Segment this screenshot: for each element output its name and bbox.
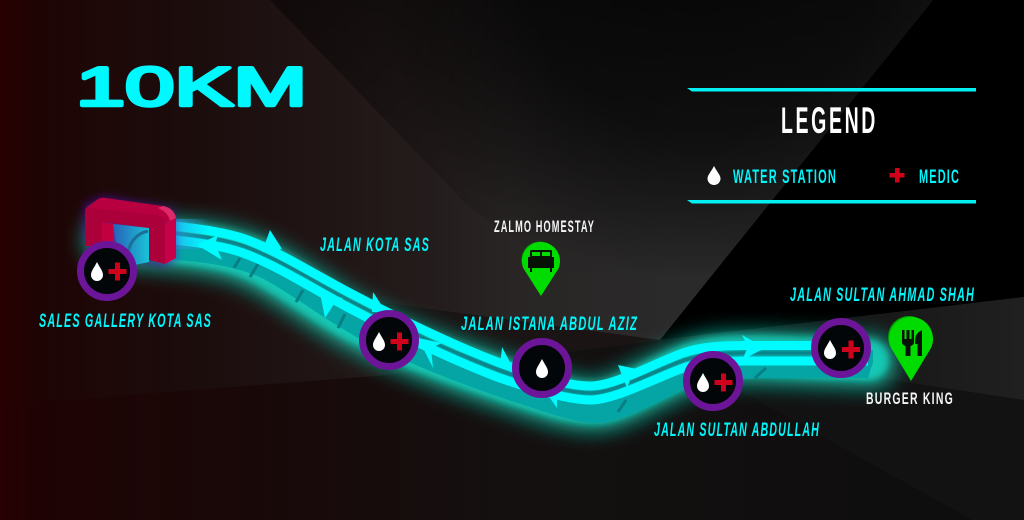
station: sales gallery	[80, 244, 134, 298]
blue fade near gate	[172, 219, 210, 249]
icon: water drop	[373, 332, 385, 351]
icon: medic cross	[842, 340, 860, 358]
medic label: MEDIC	[919, 167, 960, 188]
station: jalan kota sas	[362, 314, 416, 366]
road lower lane	[175, 240, 868, 400]
road lane divider	[175, 233, 830, 393]
gate front face	[85, 208, 165, 264]
road upper lane	[175, 226, 830, 386]
label: jalan sultan abdullah: JALAN SULTAN ABDULLAH	[654, 420, 820, 441]
legend top rule	[687, 88, 976, 92]
pin: zalmo homestay	[522, 242, 560, 296]
station: jalan istana abdul aziz	[516, 342, 568, 394]
legend	[687, 88, 976, 204]
gate top face	[85, 198, 176, 224]
legend heading: LEGEND	[781, 100, 878, 141]
label: sales gallery kota sas: SALES GALLERY KOTA SAS	[39, 311, 212, 332]
icon: medic cross	[108, 262, 126, 280]
start gate	[85, 197, 176, 268]
road side wall	[173, 232, 873, 423]
water station label: WATER STATION	[733, 167, 837, 188]
icon: water drop	[697, 373, 709, 392]
gate right side face	[165, 218, 176, 264]
icon: fork and knife	[902, 330, 922, 356]
road segment joints	[234, 258, 766, 412]
icon: medic cross	[714, 374, 732, 392]
label: jalan kota sas: JALAN KOTA SAS	[320, 235, 430, 256]
legend bottom rule	[687, 200, 976, 204]
route	[110, 219, 873, 423]
label: jalan istana abdul aziz: JALAN ISTANA ABDUL AZIZ	[461, 314, 638, 335]
route glow	[110, 240, 870, 405]
icon: medic cross legend	[890, 168, 904, 182]
direction arrows	[197, 230, 765, 408]
label: zalmo homestay: ZALMO HOMESTAY	[494, 217, 595, 236]
icon: water drop	[91, 262, 103, 281]
gate corner highlight	[158, 206, 176, 221]
title: 10KM	[76, 56, 307, 118]
gate left inner pillar	[102, 222, 113, 246]
icon: medic cross	[390, 332, 408, 350]
icon: water drop legend	[708, 166, 720, 185]
pin: burger king	[888, 316, 933, 381]
gate glow	[85, 197, 175, 265]
gate tunnel	[113, 224, 149, 268]
label: burger king: BURGER KING	[866, 389, 954, 408]
station: jalan sultan abdullah	[686, 354, 740, 408]
icon: water drop	[824, 340, 836, 359]
icon: bed	[528, 250, 554, 272]
station: jalan sultan ahmad shah	[814, 322, 868, 374]
icon: water drop	[536, 359, 548, 378]
